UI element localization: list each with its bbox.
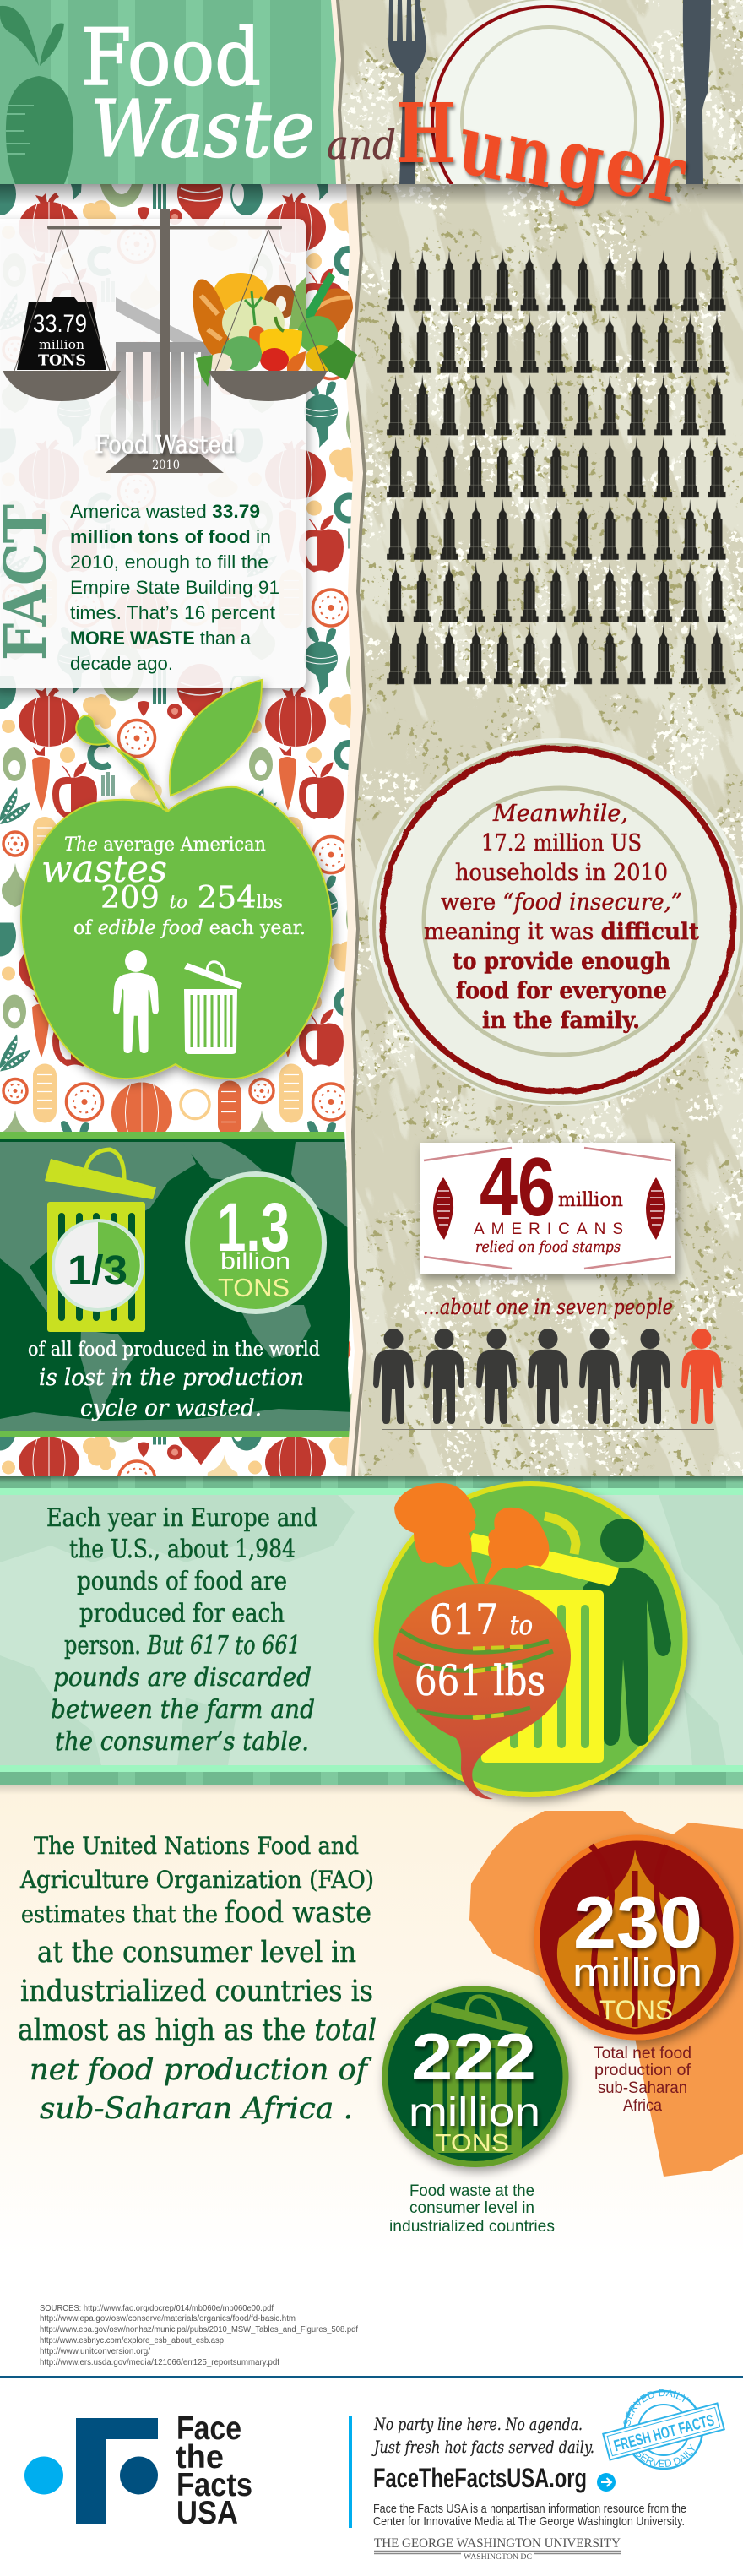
caption: food waste at consumer level: industrialized countries bbox=[389, 2218, 555, 2236]
header band: green bbox=[0, 0, 344, 184]
graphic: balance scale with food and weight bbox=[3, 209, 357, 473]
text: each year in Europe: the consumer’s table. bbox=[55, 1727, 309, 1757]
panel: dark green world map box bbox=[0, 1130, 355, 1439]
icon: arrow button bbox=[597, 2473, 616, 2492]
text: of all food produced: cycle or wasted. bbox=[80, 1395, 262, 1421]
text: sources: http://www.unitconversion.org/ bbox=[40, 2347, 150, 2356]
logo: Face the Facts USA: the bbox=[176, 2439, 224, 2475]
text: America wasted fact bbox=[70, 501, 279, 674]
text: hunger statement: to provide enough bbox=[453, 948, 670, 975]
icon: map of Africa bbox=[469, 1811, 743, 2177]
icon: scale pans and strings bbox=[3, 230, 328, 401]
text: apple text: 209 to 254lbs bbox=[100, 881, 283, 916]
text: of all food produced: is lost in the production bbox=[39, 1365, 304, 1391]
text: hunger statement bbox=[424, 801, 700, 1034]
callout: 222 million tons: TONS bbox=[435, 2130, 509, 2157]
shadow under header bbox=[0, 184, 743, 204]
text: America wasted fact: America wasted 33.79 bbox=[70, 501, 260, 522]
panel: green apple bbox=[21, 680, 332, 1079]
panel: white fact card bbox=[0, 219, 306, 688]
icon: corn right bbox=[646, 1177, 665, 1240]
text: 617 to 661 lbs bbox=[415, 1595, 545, 1705]
text: each year in Europe: person. But 617 to 661 bbox=[64, 1631, 301, 1660]
icon: black weight: 33.79 bbox=[33, 310, 87, 338]
logo: George Washington University: THE GEORGE WASHINGTON UNIVERSITY bbox=[374, 2536, 621, 2551]
logo: Face the Facts USA: USA bbox=[176, 2495, 238, 2531]
title: Food Waste and Hunger: Hunger bbox=[396, 85, 691, 224]
stamp: fresh hot facts bbox=[602, 2389, 725, 2470]
text: sources: http://www.epa.gov/osw/nonhaz/municipal/pubs/2010_MSW_Tables_and_Figures_508.pdf bbox=[40, 2325, 358, 2334]
divider: vertical blue bbox=[349, 2416, 352, 2528]
text: UN FAO statement: Agriculture Organization (FAO) bbox=[19, 1866, 374, 1894]
icon: person bbox=[113, 950, 159, 1053]
text: America wasted fact: times. That’s 16 percent bbox=[70, 602, 275, 623]
text: each year in Europe: pounds are discarded bbox=[53, 1663, 312, 1693]
text: each year in Europe: pounds of food are bbox=[77, 1567, 287, 1596]
callout: 1.3 billion tons: TONS bbox=[218, 1273, 290, 1302]
callout: 222 million tons bbox=[385, 1988, 566, 2164]
panel: mint section bbox=[0, 1476, 743, 1785]
logo: Face the Facts USA: Facts bbox=[176, 2467, 252, 2503]
text: hunger statement: food for everyone bbox=[456, 978, 667, 1004]
text: of all food produced bbox=[28, 1339, 320, 1421]
panel: plate with hunger text bbox=[368, 738, 743, 1106]
logo: Face the Facts USA: Face bbox=[176, 2410, 241, 2447]
text: of all food produced: of all food produced in the world bbox=[28, 1339, 320, 1361]
icon: lime trash can bbox=[45, 1149, 156, 1332]
text: hunger statement: households in 2010 bbox=[455, 860, 668, 886]
text: each year in Europe: the U.S., about 1,984 bbox=[69, 1535, 296, 1564]
text: UN FAO statement bbox=[18, 1832, 377, 2126]
graphic: beet going into trash bbox=[377, 1483, 686, 1799]
text: UN FAO statement: at the consumer level in bbox=[37, 1936, 356, 1970]
logo: George Washington University bbox=[374, 2536, 621, 2561]
text: tagline bbox=[372, 2414, 594, 2457]
text: UN FAO statement: The United Nations Food and bbox=[34, 1832, 359, 1860]
text: UN FAO statement: estimates that the food waste bbox=[21, 1896, 372, 1930]
text: hunger statement: were “food insecure,” bbox=[441, 889, 682, 916]
torn edge: header bbox=[333, 0, 346, 184]
graphic: trash can with one third bbox=[45, 1149, 156, 1332]
callout: 1.3 billion tons: billion bbox=[220, 1248, 290, 1274]
icon: corn left bbox=[433, 1177, 453, 1240]
shadow under mint band bbox=[0, 1785, 743, 1795]
icon: yellow trash can bbox=[466, 1516, 619, 1763]
callout: 222 million tons: 222 bbox=[411, 2019, 536, 2094]
text: each year in Europe: between the farm and bbox=[51, 1695, 315, 1725]
callout: 1.3 billion tons: 1.3 bbox=[217, 1189, 290, 1266]
label: food wasted: 2010 bbox=[152, 459, 180, 472]
text: America wasted fact: million tons of food in bbox=[70, 526, 271, 547]
caption: total net food production bbox=[594, 2045, 691, 2115]
text: America wasted fact: 2010, enough to fill the bbox=[70, 552, 268, 573]
text: apple text: The average American bbox=[64, 834, 266, 856]
callout: 230 million tons: TONS bbox=[599, 1995, 673, 2025]
text: each year in Europe: produced for each bbox=[79, 1599, 285, 1628]
text: tagline: No party line here. No agenda. bbox=[373, 2414, 583, 2434]
icon: onion bbox=[557, 1845, 716, 2029]
icon: beet bbox=[393, 1483, 571, 1799]
panel: 46 million card: 46 bbox=[480, 1140, 556, 1233]
stamp: fresh hot facts: SERVED DAILY bbox=[623, 2389, 689, 2426]
callout: 230 million tons: million bbox=[572, 1951, 702, 1996]
panel: 46 million card: relied on food stamps bbox=[475, 1238, 621, 1256]
chart: 91 empire state buildings bbox=[387, 250, 735, 686]
callout: 222 million tons: million bbox=[409, 2090, 540, 2135]
caption: total net food production: sub-Saharan bbox=[598, 2079, 687, 2097]
icon: one third pie: 1/3 bbox=[68, 1248, 127, 1293]
logo: Face the Facts USA bbox=[24, 2410, 252, 2531]
text: website: FaceTheFactsUSA.org bbox=[373, 2463, 587, 2493]
background: pattern column bbox=[0, 184, 372, 1478]
text: about one in seven people: ...about one in seven people bbox=[423, 1295, 673, 1319]
logo: George Washington University: WASHINGTON DC bbox=[464, 2552, 532, 2561]
callout: 1.3 billion tons bbox=[187, 1174, 324, 1312]
chart: one in seven people bbox=[373, 1329, 722, 1430]
caption: total net food production: production of bbox=[594, 2062, 691, 2079]
text: hunger statement: in the family. bbox=[482, 1008, 640, 1034]
caption: food waste at consumer level bbox=[389, 2182, 555, 2236]
text: hunger statement: Meanwhile, bbox=[492, 801, 628, 827]
panel: right beige textured column bbox=[353, 184, 743, 1476]
text: UN FAO statement: sub-Saharan Africa . bbox=[40, 2092, 353, 2126]
icon: black weight: TONS bbox=[38, 351, 86, 370]
icon: one third pie bbox=[53, 1220, 143, 1310]
icon: carrot silhouette bbox=[0, 6, 73, 184]
text: sources: http://www.epa.gov/osw/conserve/materials/organics/food/fd-basic.htm bbox=[40, 2314, 296, 2323]
header band: beige with plate and cutlery bbox=[339, 0, 743, 184]
panel: cream background bbox=[0, 1785, 743, 2258]
panel: 46 million card: AMERICANS bbox=[474, 1220, 623, 1238]
title: Food Waste and Hunger: Food bbox=[81, 12, 261, 103]
text: apple text bbox=[41, 834, 306, 939]
text: America wasted fact: decade ago. bbox=[70, 653, 173, 674]
icon: apple shape bbox=[21, 680, 332, 1079]
callout: 230 million tons bbox=[537, 1838, 736, 2037]
text: each year in Europe: Each year in Europe and bbox=[46, 1503, 317, 1533]
icon: knife bbox=[683, 0, 711, 184]
text: each year in Europe bbox=[46, 1503, 317, 1757]
caption: food waste at consumer level: consumer level in bbox=[409, 2199, 534, 2217]
caption: total net food production: Africa bbox=[623, 2097, 662, 2115]
panel: 46 million card: million bbox=[558, 1189, 623, 1211]
title: Food Waste and Hunger: and bbox=[327, 122, 396, 169]
icon: grey trash can behind scale bbox=[116, 297, 211, 458]
icon: plate bbox=[421, 0, 673, 184]
text: 617 to 661 lbs: 661 lbs bbox=[415, 1656, 545, 1705]
torn edge: mid bbox=[343, 184, 365, 1476]
text: America wasted fact: MORE WASTE than a bbox=[70, 628, 252, 649]
panel: 46 million card bbox=[420, 1140, 675, 1274]
icon: person throwing bbox=[583, 1519, 671, 1746]
text: apple text: of edible food each year. bbox=[73, 917, 306, 939]
text: about blurb: Face the Facts USA is a nonpartisan information resource from the bbox=[373, 2502, 686, 2516]
label: food wasted: Food Wasted bbox=[95, 430, 235, 459]
icon: fork bbox=[388, 0, 426, 184]
text: sources: http://www.ers.usda.gov/media/121066/err125_reportsummary.pdf bbox=[40, 2358, 279, 2367]
text: tagline: Just fresh hot facts served daily. bbox=[372, 2437, 594, 2457]
icon: black weight bbox=[17, 297, 106, 370]
divider rule bbox=[0, 2376, 743, 2378]
text: about blurb bbox=[373, 2502, 686, 2529]
text: UN FAO statement: almost as high as the total bbox=[18, 2014, 377, 2047]
text: about blurb: Center for Innovative Media at The George Washington University. bbox=[373, 2514, 685, 2529]
caption: food waste at consumer level: Food waste at the bbox=[409, 2182, 534, 2200]
text: 617 to 661 lbs: 617 to bbox=[430, 1595, 533, 1644]
title: Food Waste and Hunger: Waste bbox=[90, 84, 315, 175]
label: food wasted bbox=[95, 430, 235, 472]
stamp: fresh hot facts: SERVED DAILY bbox=[636, 2444, 695, 2468]
text: sources bbox=[40, 2304, 358, 2367]
icon: black weight: million bbox=[39, 337, 84, 352]
callout: 230 million tons: 230 bbox=[573, 1883, 702, 1964]
text: UN FAO statement: industrialized countries is bbox=[20, 1975, 373, 2008]
icon: distressed plate bbox=[368, 738, 743, 1106]
text: apple text: wastes bbox=[41, 848, 167, 891]
text: sources: http://www.esbnyc.com/explore_esb_about_esb.asp bbox=[40, 2336, 224, 2345]
icon: trash can bbox=[184, 962, 242, 1054]
text: UN FAO statement: net food production of bbox=[30, 2053, 372, 2087]
text: sources: SOURCES: http://www.fao.org/docrep/014/mb060e/mb060e00.pdf bbox=[40, 2304, 274, 2313]
text: hunger statement: meaning it was difficult bbox=[424, 919, 700, 945]
caption: total net food production: Total net food bbox=[594, 2045, 691, 2062]
text: hunger statement: 17.2 million US bbox=[481, 830, 642, 856]
icon: pile of food bbox=[186, 272, 357, 387]
icon: trash can in circle bbox=[431, 1997, 528, 2153]
title: Food Waste and Hunger bbox=[81, 12, 691, 224]
text: America wasted fact: Empire State Building 91 bbox=[70, 577, 279, 598]
